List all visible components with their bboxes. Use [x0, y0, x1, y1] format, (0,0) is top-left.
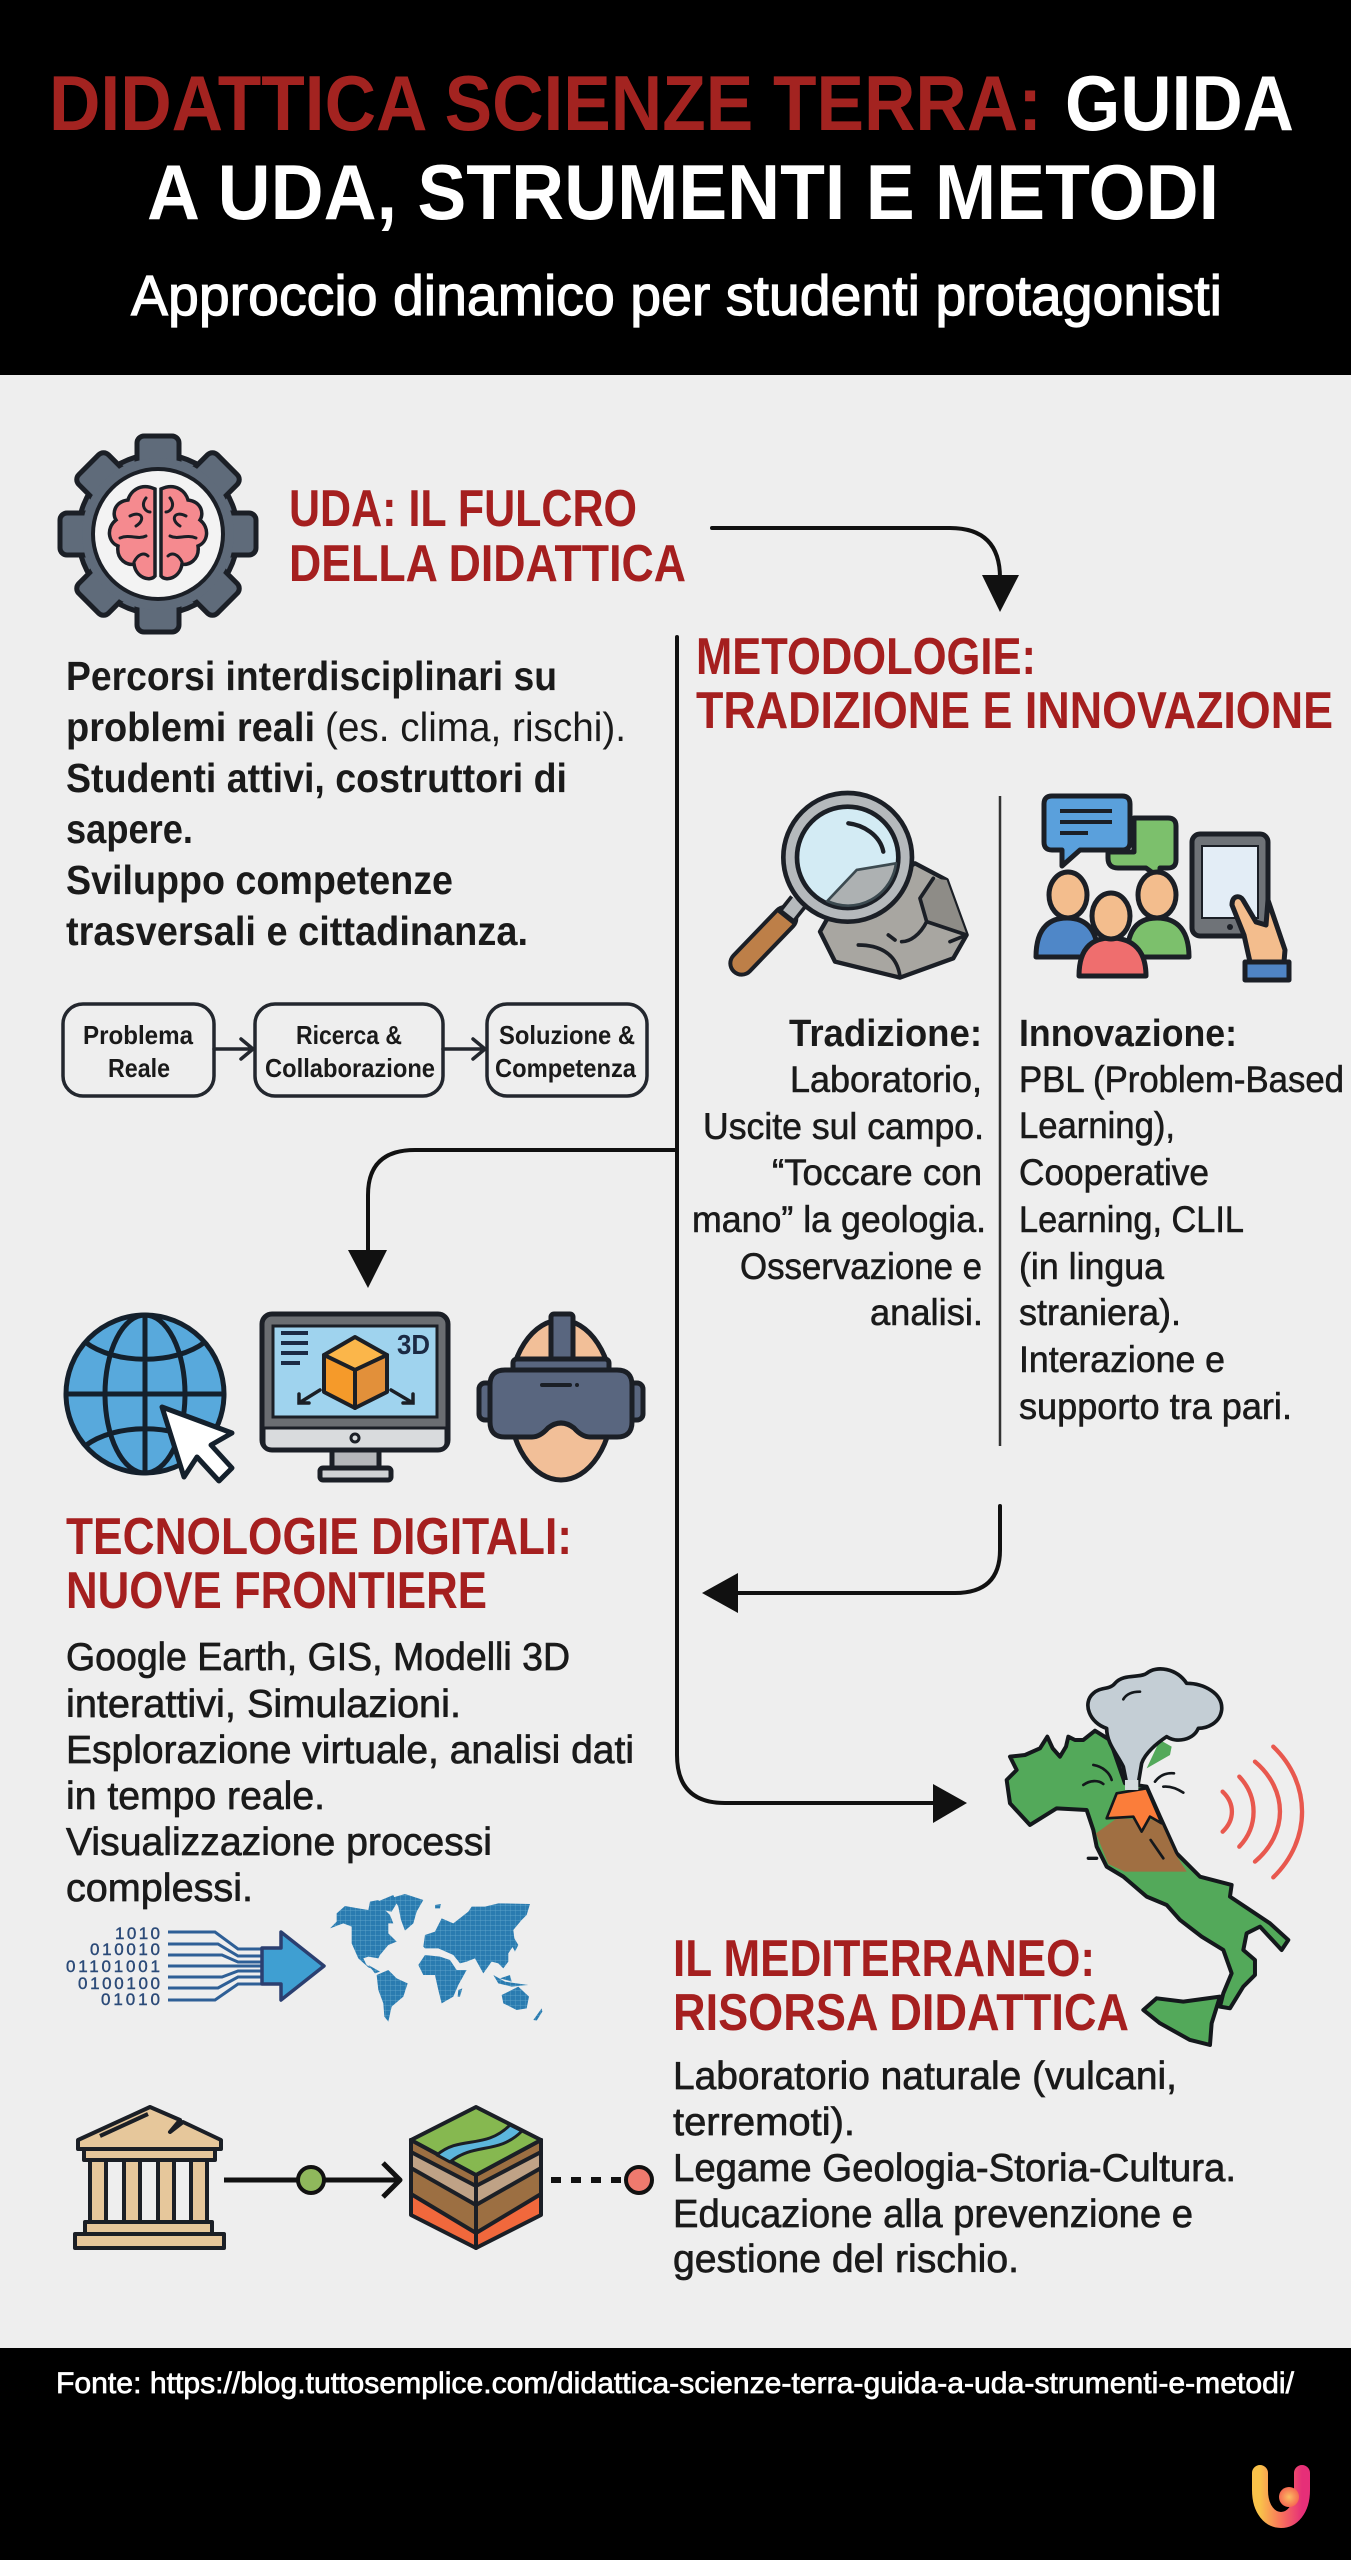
- flow arrow: branch to Tecnologie: [348, 1150, 677, 1288]
- icon: VR headset: [479, 1314, 643, 1480]
- text block: Innovazione: supporto tra pari.: [1019, 1386, 1292, 1427]
- text block: UDA: problemi reali: [66, 704, 315, 750]
- icon: Italy with volcano: [1007, 1669, 1302, 2045]
- process flow: Ricerca &: [296, 1020, 402, 1050]
- panel: Metodologie: [692, 628, 1344, 1446]
- heading: Mediterraneo: [673, 1930, 1129, 2042]
- icon: globe with cursor: [66, 1315, 232, 1481]
- process flow: Competenza: [495, 1053, 636, 1083]
- title: GUIDA: [1065, 59, 1294, 147]
- icon: binary data to arrow: 01101001: [66, 1957, 160, 1976]
- icon: binary data to arrow: 0100100: [78, 1974, 160, 1993]
- text block: Innovazione: straniera).: [1019, 1292, 1181, 1333]
- text block: UDA: Studenti attivi, costruttori di: [66, 755, 567, 801]
- icon: world data map: [330, 1894, 542, 2022]
- icon: gear with brain: [60, 436, 256, 632]
- text block: UDA: (es. clima, rischi).: [325, 704, 626, 750]
- heading: Tecnologie: TECNOLOGIE DIGITALI:: [66, 1508, 572, 1566]
- text block: UDA: trasversali e cittadinanza.: [66, 908, 528, 954]
- text block: Tradizione: [692, 1013, 986, 1333]
- text block: Mediterraneo: gestione del rischio.: [673, 2238, 1019, 2281]
- text block: Tecnologie: interattivi, Simulazioni.: [66, 1683, 461, 1726]
- text block: Tecnologie: complessi.: [66, 1867, 253, 1910]
- text block: Tecnologie: Visualizzazione processi: [66, 1821, 492, 1864]
- text block: Tradizione: analisi.: [870, 1292, 983, 1333]
- footer band: [0, 2348, 1351, 2560]
- logo: [1260, 2473, 1302, 2520]
- heading: Mediterraneo: IL MEDITERRANEO:: [673, 1930, 1095, 1988]
- text block: Innovazione: Interazione e: [1019, 1339, 1225, 1380]
- heading: Metodologie: METODOLOGIE:: [696, 628, 1036, 686]
- subtitle: Approccio dinamico per studenti protagonisti: [131, 264, 1222, 328]
- title: DIDATTICA SCIENZE TERRA:: [49, 59, 1042, 147]
- text block: Tradizione: Tradizione:: [789, 1013, 982, 1055]
- heading: UDA: [289, 480, 686, 593]
- icon: binary data to arrow: 010010: [90, 1940, 160, 1959]
- icon: students and tablet: [1036, 796, 1289, 980]
- icon: monitor with 3D cube: [262, 1314, 448, 1480]
- icon: temple to geology link: [75, 2107, 652, 2248]
- header band: [0, 0, 1351, 375]
- process flow: [63, 1004, 647, 1096]
- text block: Innovazione: [1019, 1013, 1344, 1427]
- flow arrow: main trunk to Mediterraneo: [677, 637, 967, 1823]
- text block: Innovazione: Cooperative: [1019, 1152, 1209, 1193]
- text block: Mediterraneo: Laboratorio naturale (vulcani,: [673, 2055, 1177, 2098]
- icon: geological block: [411, 2107, 541, 2248]
- text block: UDA: sapere.: [66, 806, 193, 852]
- heading: Tecnologie: [66, 1508, 572, 1620]
- text block: Mediterraneo: Legame Geologia-Storia-Cultura.: [673, 2147, 1236, 2190]
- flow arrow: UDA to Metodologie: [712, 528, 1019, 612]
- text block: Mediterraneo: [673, 2055, 1236, 2281]
- text block: Mediterraneo: Educazione alla prevenzione e: [673, 2193, 1193, 2236]
- text block: UDA: Percorsi interdisciplinari su: [66, 653, 557, 699]
- panel: UDA: [60, 436, 686, 1096]
- text block: Innovazione: Innovazione:: [1019, 1013, 1237, 1055]
- text block: Innovazione: (in lingua: [1019, 1246, 1164, 1287]
- text block: Tradizione: mano” la geologia.: [692, 1199, 986, 1240]
- source line: Fonte: https://blog.tuttosemplice.com/didattica-scienze-terra-guida-a-uda-strumenti-e-metodi/: [56, 2367, 1295, 2400]
- panel: Tecnologie digitali: [66, 1314, 652, 2248]
- text block: Tradizione: “Toccare con: [772, 1152, 982, 1193]
- text block: Tradizione: Laboratorio,: [790, 1059, 982, 1100]
- text block: Tecnologie: Google Earth, GIS, Modelli 3D: [66, 1636, 570, 1679]
- link arrow: [224, 2163, 400, 2197]
- text block: Tecnologie: in tempo reale.: [66, 1775, 325, 1818]
- process flow: Collaborazione: [265, 1053, 435, 1083]
- panel: Mediterraneo: [673, 1669, 1302, 2281]
- title: [49, 59, 1294, 236]
- flow arrow: Metodologie back to trunk: [702, 1506, 1000, 1613]
- icon: binary data to arrow: 1010: [115, 1924, 160, 1943]
- text block: Tecnologie: [66, 1636, 634, 1910]
- icon: temple: [75, 2107, 224, 2248]
- text block: Tradizione: Uscite sul campo.: [703, 1106, 984, 1147]
- text block: Innovazione: Learning, CLIL: [1019, 1199, 1244, 1240]
- icon: binary data to arrow: [66, 1924, 324, 2009]
- text block: Mediterraneo: terremoti).: [673, 2101, 855, 2144]
- node: green: [298, 2167, 324, 2193]
- icon: monitor with 3D cube: 3D: [397, 1329, 430, 1360]
- icon: magnifier over rock: [742, 793, 967, 978]
- text block: Tecnologie: Esplorazione virtuale, analisi dati: [66, 1729, 634, 1772]
- heading: UDA: DELLA DIDATTICA: [289, 535, 686, 593]
- process flow: Problema: [83, 1020, 193, 1050]
- title: A UDA, STRUMENTI E METODI: [147, 148, 1219, 236]
- text block: UDA: [66, 653, 626, 954]
- process flow: Soluzione &: [499, 1020, 635, 1050]
- heading: Metodologie: [696, 628, 1333, 740]
- dashed link: [551, 2177, 624, 2183]
- text block: Innovazione: Learning),: [1019, 1105, 1175, 1146]
- heading: Mediterraneo: RISORSA DIDATTICA: [673, 1984, 1129, 2042]
- column divider: [999, 796, 1001, 1446]
- heading: UDA: UDA: IL FULCRO: [289, 480, 637, 538]
- text block: Tradizione: Osservazione e: [740, 1246, 982, 1287]
- icon: binary data to arrow: 01010: [101, 1990, 160, 2009]
- node: red: [626, 2167, 652, 2193]
- process flow: Reale: [108, 1053, 170, 1083]
- heading: Tecnologie: NUOVE FRONTIERE: [66, 1562, 487, 1620]
- text block: UDA: Sviluppo competenze: [66, 857, 453, 903]
